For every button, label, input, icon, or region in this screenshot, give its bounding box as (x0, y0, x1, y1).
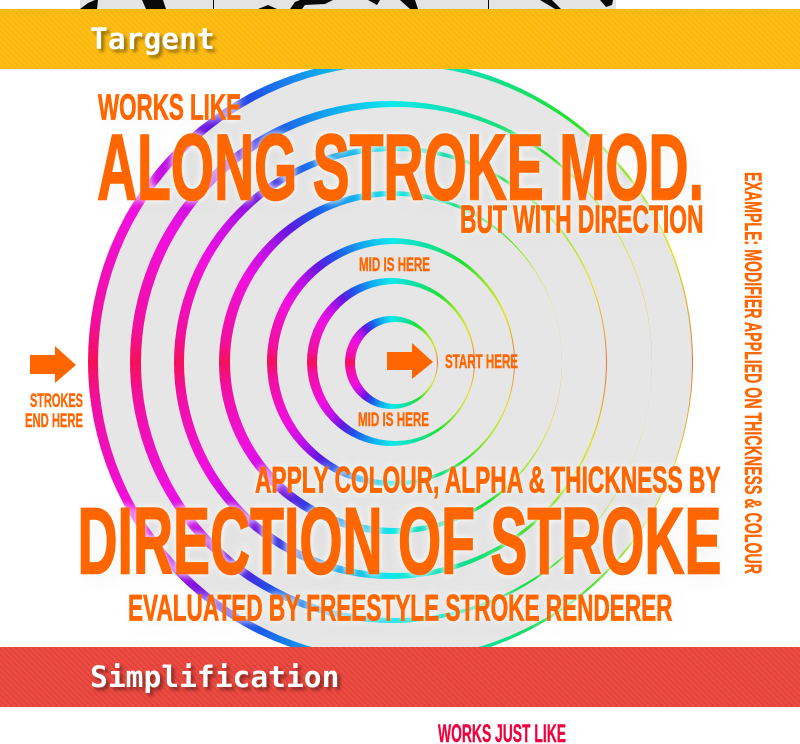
section bar: Targent (0, 9, 800, 69)
section title: Targent: Targent (90, 22, 215, 56)
label: strokes end here: END HERE (25, 411, 83, 432)
section bar: Simplification (0, 647, 800, 707)
previous figure remnant at top (80, 0, 616, 9)
section title: Simplification: Simplification (90, 660, 339, 694)
label: mid is here top: MID IS HERE (359, 255, 430, 276)
arrow: start (387, 343, 433, 379)
label: strokes end here: STROKES (30, 391, 83, 412)
text: works like: WORKS LIKE (98, 86, 241, 128)
arrow: end (30, 346, 76, 383)
label: start here: START HERE (445, 352, 518, 373)
label: strokes end here (25, 391, 83, 432)
label: mid is here bottom: MID IS HERE (358, 410, 429, 431)
